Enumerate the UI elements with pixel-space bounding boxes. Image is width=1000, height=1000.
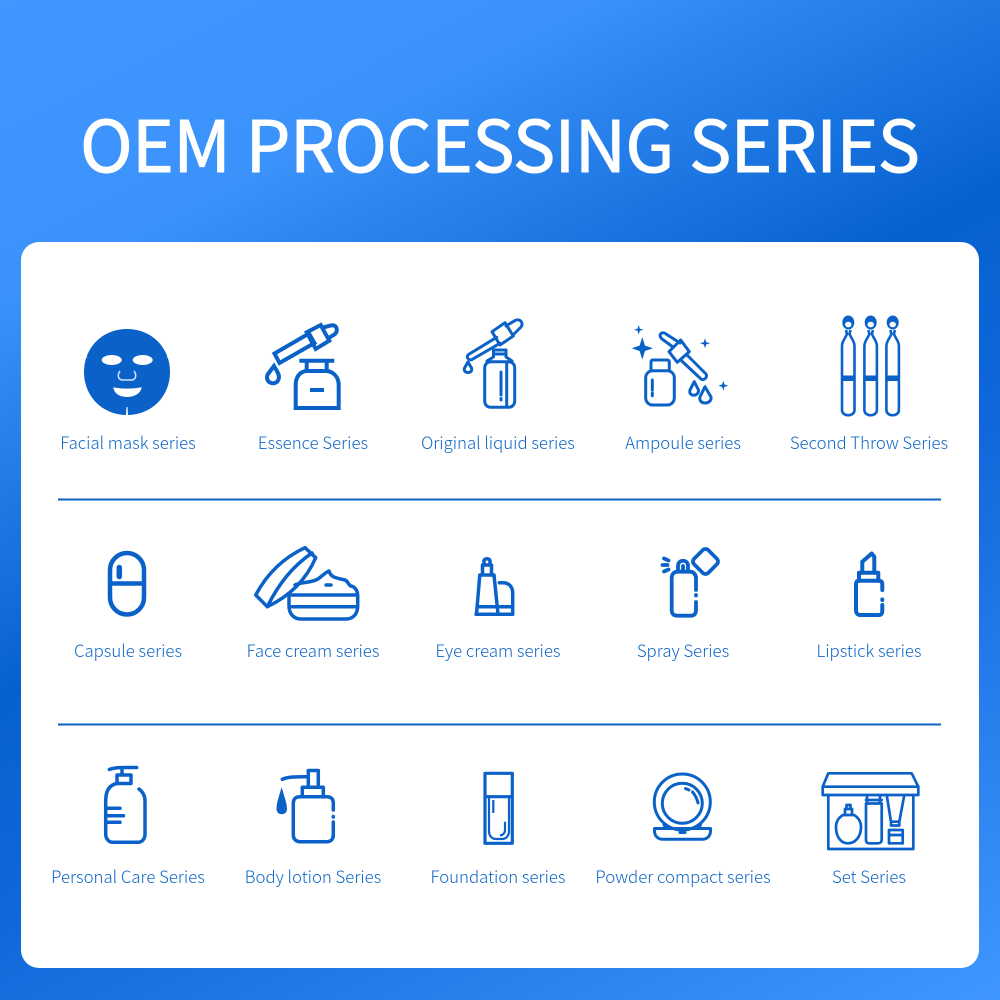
item: face cream <box>247 548 379 662</box>
item: foundation <box>430 773 566 888</box>
title: OEM PROCESSING SERIES <box>80 91 920 193</box>
item: set <box>823 773 918 888</box>
item: powder compact: Powder compact series <box>595 864 771 888</box>
item: powder compact <box>595 774 771 888</box>
item: essence: Essence Series <box>258 430 368 454</box>
item: lipstick: Lipstick series <box>816 638 922 662</box>
item: personal care: Personal Care Series <box>51 864 205 888</box>
item: personal care <box>51 767 205 888</box>
item: original liquid <box>421 320 575 454</box>
item: lipstick <box>816 554 922 662</box>
item: spray <box>637 547 729 662</box>
item: face cream: Face cream series <box>247 638 379 662</box>
item: capsule <box>74 553 182 662</box>
item: spray: Spray Series <box>637 638 729 662</box>
item: facial mask <box>60 329 196 454</box>
item: capsule: Capsule series <box>74 638 182 662</box>
item: second throw <box>790 316 948 454</box>
item: ampoule: Ampoule series <box>625 430 741 454</box>
item: original liquid: Original liquid series <box>421 430 575 454</box>
panel: product series <box>21 242 979 968</box>
item: set: Set Series <box>832 864 906 888</box>
item: body lotion <box>245 770 381 888</box>
item: eye cream <box>436 559 560 662</box>
item: body lotion: Body lotion Series <box>245 864 381 888</box>
item: second throw: Second Throw Series <box>790 430 948 454</box>
item: essence <box>258 325 368 454</box>
item: facial mask: Facial mask series <box>60 430 196 454</box>
item: foundation: Foundation series <box>430 864 566 888</box>
item: ampoule <box>625 325 741 454</box>
item: eye cream: Eye cream series <box>436 638 560 662</box>
